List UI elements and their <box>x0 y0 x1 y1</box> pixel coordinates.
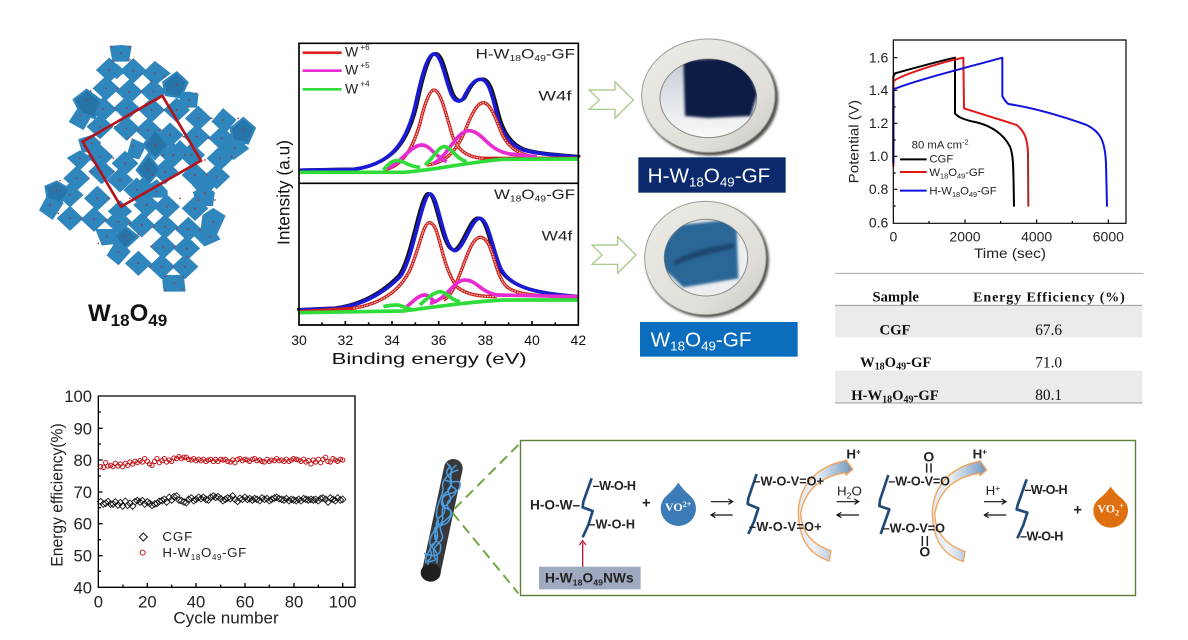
H-W18O49-GF data series <box>101 457 343 467</box>
reaction step 1: nanowire with hydroxyl groups: –W-O-H <box>593 479 636 493</box>
charge-discharge axis text: 2000 <box>949 228 981 244</box>
cycling chart legend: 18 <box>191 553 201 562</box>
reaction step 1: nanowire with hydroxyl groups <box>530 478 733 589</box>
H2O equilibrium <box>837 484 862 518</box>
XPS frame and ticks <box>299 43 578 325</box>
XPS axis labels: 36 <box>431 332 447 348</box>
XPS legend: W <box>345 80 358 96</box>
XPS axis labels <box>273 140 586 368</box>
regenerated hydroxyl structure: –W-O-H <box>1024 483 1068 497</box>
nanowire callout: 49 <box>593 577 603 587</box>
cycling efficiency chart <box>47 387 357 627</box>
unit cell rectangle <box>83 96 201 207</box>
cycling chart axis text: 40 <box>187 593 205 612</box>
XPS panel labels: 49 <box>534 53 546 63</box>
cycling chart axis text: 100 <box>64 387 92 406</box>
charge-discharge legend: 49 <box>969 190 977 199</box>
H+ label 2: + <box>982 447 987 456</box>
cycling chart axis text: Cycle number <box>173 608 279 627</box>
energy efficiency table: Energy Efficiency (%) <box>973 291 1125 306</box>
crystal label: 18 <box>111 311 130 330</box>
dioxo V structure <box>879 449 950 560</box>
VO2+ product droplet: 2 <box>1115 508 1119 517</box>
cycling chart legend: CGF <box>162 529 192 544</box>
charge-discharge frame <box>893 40 1126 223</box>
charge-discharge axis text: 1.0 <box>869 148 889 164</box>
charge-discharge axis text: 0.8 <box>869 181 889 197</box>
nanowire callout: NWs <box>603 571 634 586</box>
label: H-W18O49-GF: H-W <box>648 165 689 188</box>
H+ label 1: + <box>856 447 861 456</box>
energy efficiency table <box>835 273 1143 406</box>
regenerated hydroxyl structure <box>1017 479 1068 544</box>
sample photos <box>589 39 798 357</box>
XPS axis labels: 38 <box>478 332 493 348</box>
energy efficiency table: CGF <box>880 322 911 338</box>
charge-discharge legend: 49 <box>957 171 965 180</box>
cycling chart axis text: 60 <box>236 593 254 612</box>
reaction mechanism panel <box>520 440 1136 596</box>
XPS axis labels: 34 <box>384 332 400 348</box>
H+ equilibrium: + <box>995 483 1000 493</box>
cycling chart legend: H-W <box>162 545 190 560</box>
charge-discharge axis text: 0.6 <box>869 214 889 230</box>
charge-discharge legend: O <box>960 186 969 198</box>
XPS chart <box>273 43 586 368</box>
energy efficiency table: 80.1 <box>1035 387 1062 404</box>
intermediate V-O structure: –W-O-V=O+ <box>753 475 824 489</box>
label: H-W18O49-GF: 18 <box>689 175 704 190</box>
reaction steps 2 to 4: + <box>1073 502 1082 518</box>
curved arrow 1 <box>798 460 853 561</box>
charge-discharge axis text: 0 <box>889 228 897 244</box>
dioxo V structure: O <box>923 449 934 465</box>
cycling chart axis text <box>47 387 357 627</box>
cycling chart legend: O <box>201 545 211 560</box>
charge-discharge legend: O <box>948 167 957 179</box>
energy efficiency table: -GF <box>914 388 939 404</box>
charge-discharge legend: W <box>929 167 940 179</box>
XPS axis labels: 30 <box>291 332 307 348</box>
VO2+ product droplet: + <box>1119 502 1124 511</box>
cycling chart legend: 49 <box>212 553 222 562</box>
XPS panel labels: -GF <box>546 45 575 61</box>
XPS legend <box>303 43 370 96</box>
XPS panel labels: 18 <box>510 194 522 204</box>
cycling chart axis text: 100 <box>329 593 357 612</box>
XPS legend: +4 <box>358 80 370 89</box>
VO2+ droplet: VO <box>665 500 683 514</box>
XPS panel labels: 18 <box>509 53 521 63</box>
photo: H-W18O49-GF disc <box>642 39 778 156</box>
XPS panel labels: O <box>521 45 534 61</box>
dioxo V structure: O <box>919 544 930 560</box>
intermediate V-O structure: –W-O-V=O+ <box>749 520 822 534</box>
energy efficiency table: 71.0 <box>1035 354 1062 371</box>
energy efficiency table: -GF <box>906 355 931 371</box>
charge-discharge legend: -GF <box>977 186 997 198</box>
cycling chart axis text: 50 <box>73 547 92 566</box>
label: W18O49-GF: W <box>651 329 670 352</box>
intermediate V-O structure <box>748 474 824 534</box>
VO2+ droplet <box>661 483 696 526</box>
XPS panel labels: -GF <box>546 186 575 202</box>
CGF data series <box>101 496 343 506</box>
charge-discharge legend: H-W <box>929 186 952 198</box>
VO2+ product droplet <box>1093 487 1128 528</box>
XPS axis labels: 40 <box>524 332 540 348</box>
XPS axis labels: 42 <box>571 332 586 348</box>
label: W18O49-GF: O <box>685 329 701 352</box>
crystal label: W <box>88 300 111 327</box>
XPS legend: W <box>345 44 358 60</box>
charge-discharge legend: 18 <box>940 171 948 180</box>
crystal structure W18O49 <box>42 47 253 290</box>
cycling chart axis text: 60 <box>73 515 92 534</box>
label: W18O49-GF: -GF <box>716 329 751 352</box>
XPS legend: +5 <box>358 61 370 70</box>
XPS panel labels: W4f <box>538 88 572 104</box>
H+ equilibrium: H <box>986 483 995 498</box>
H2O equilibrium: H <box>837 484 847 499</box>
energy efficiency table: H-W <box>851 388 882 404</box>
label: W18O49-GF: 18 <box>670 339 685 354</box>
charge-discharge axis text: 4000 <box>1021 228 1052 244</box>
reaction step 1: nanowire with hydroxyl groups: + <box>642 495 651 511</box>
energy efficiency table: O <box>885 355 896 371</box>
cycling chart legend <box>139 529 246 562</box>
cycling chart axis text: Energy efficiency(%) <box>47 423 66 567</box>
cycling chart legend: -GF <box>222 545 246 560</box>
regenerated hydroxyl structure: –W-O-H <box>1020 530 1063 544</box>
arrow to upper photo <box>589 82 633 118</box>
energy efficiency table: 18 <box>882 395 892 406</box>
H+ label 1: H <box>846 446 856 461</box>
XPS panel labels: O <box>521 186 535 202</box>
XPS legend: +6 <box>358 43 370 52</box>
energy efficiency table: Sample <box>872 290 919 306</box>
nanowire callout: H-W <box>545 571 573 586</box>
cycling chart frame <box>98 396 355 587</box>
XPS axis labels: Binding energy (eV) <box>332 351 527 368</box>
photo: W18O49-GF disc <box>645 201 769 317</box>
charge-discharge legend: CGF <box>929 154 953 166</box>
cycling chart axis text: 0 <box>94 593 103 612</box>
H+ label 2: H <box>973 446 982 461</box>
charge-discharge legend: -2 <box>962 137 969 146</box>
energy efficiency table: 49 <box>896 362 906 373</box>
energy efficiency table: 67.6 <box>1035 322 1062 339</box>
XPS panel labels <box>476 45 575 244</box>
charge-discharge axis text <box>846 49 1124 261</box>
label: H-W18O49-GF <box>638 157 786 193</box>
charge-discharge axis text: Potential (V) <box>846 100 862 183</box>
VO2+ product droplet: VO <box>1097 502 1115 516</box>
nanowire callout: O <box>582 571 593 586</box>
XPS panel labels: H-W <box>476 45 504 61</box>
cycling chart axis text: 20 <box>138 593 157 612</box>
arrow to lower photo <box>592 237 636 273</box>
nanowire callout: 18 <box>573 577 583 587</box>
equilibrium arrows 1 <box>711 499 733 518</box>
charge-discharge axis text: 1.4 <box>869 82 889 98</box>
XPS legend: W <box>345 62 358 78</box>
charge-discharge axis text: Time (sec) <box>974 245 1046 261</box>
charge-discharge axis text: 1.6 <box>869 49 889 65</box>
H2O equilibrium: O <box>851 484 862 499</box>
charge-discharge axis text: 6000 <box>1093 228 1124 244</box>
energy efficiency table: O <box>892 388 904 404</box>
crystal label: 49 <box>148 311 167 330</box>
cycling chart axis text: 80 <box>285 593 303 612</box>
H2O equilibrium: 2 <box>847 490 852 500</box>
XPS lower curves <box>297 193 578 313</box>
XPS panel labels: W4f <box>542 228 572 244</box>
energy efficiency table: W <box>860 355 875 371</box>
label: W18O49-GF <box>640 322 798 357</box>
dioxo V structure: –W-O-V=O <box>883 521 945 535</box>
dioxo V structure: –W-O-V=O <box>888 475 950 489</box>
label: H-W18O49-GF: -GF <box>735 165 770 188</box>
charge-discharge legend: 80 mA cm <box>912 139 962 151</box>
label: W18O49-GF: 49 <box>701 339 716 354</box>
VO2+ droplet: 2+ <box>683 500 692 509</box>
charge-discharge legend: -GF <box>965 167 985 179</box>
cycling chart axis text: 90 <box>73 419 92 438</box>
energy efficiency table: 49 <box>904 395 914 406</box>
XPS axis labels: 32 <box>338 332 353 348</box>
XPS panel labels: W <box>494 186 507 202</box>
XPS panel labels: 49 <box>535 194 546 204</box>
nanowire callout <box>539 541 641 589</box>
label: H-W18O49-GF: O <box>704 165 720 188</box>
mechanism: fiber rod with zoom lines <box>421 445 518 593</box>
charge-discharge curves <box>893 58 1107 207</box>
cycling chart axis text: 70 <box>73 483 92 502</box>
reaction step 1: nanowire with hydroxyl groups: H-O-W– <box>530 497 580 512</box>
XPS axis labels: Intensity (a.u) <box>273 140 293 245</box>
charge-discharge chart <box>835 40 1143 406</box>
cycling chart axis text: 80 <box>73 451 92 470</box>
darker central polyhedra <box>47 74 253 247</box>
dashed zoom lines <box>452 445 518 593</box>
reaction steps 2 to 4 <box>748 446 1128 562</box>
charge-discharge axis text: 1.2 <box>869 115 889 131</box>
XPS upper curves <box>299 53 580 172</box>
label: H-W18O49-GF: 49 <box>720 175 735 190</box>
reaction step 1: nanowire with hydroxyl groups: –W-O-H <box>588 517 635 531</box>
graphite fiber rod <box>421 463 460 582</box>
energy efficiency table: 18 <box>875 362 885 373</box>
charge-discharge legend <box>900 137 997 199</box>
charge-discharge legend: 18 <box>952 190 960 199</box>
cycling chart axis text: 40 <box>73 578 92 597</box>
H+ equilibrium <box>984 483 1006 518</box>
crystal label: O <box>130 300 148 327</box>
curved arrow 2 <box>932 461 987 562</box>
